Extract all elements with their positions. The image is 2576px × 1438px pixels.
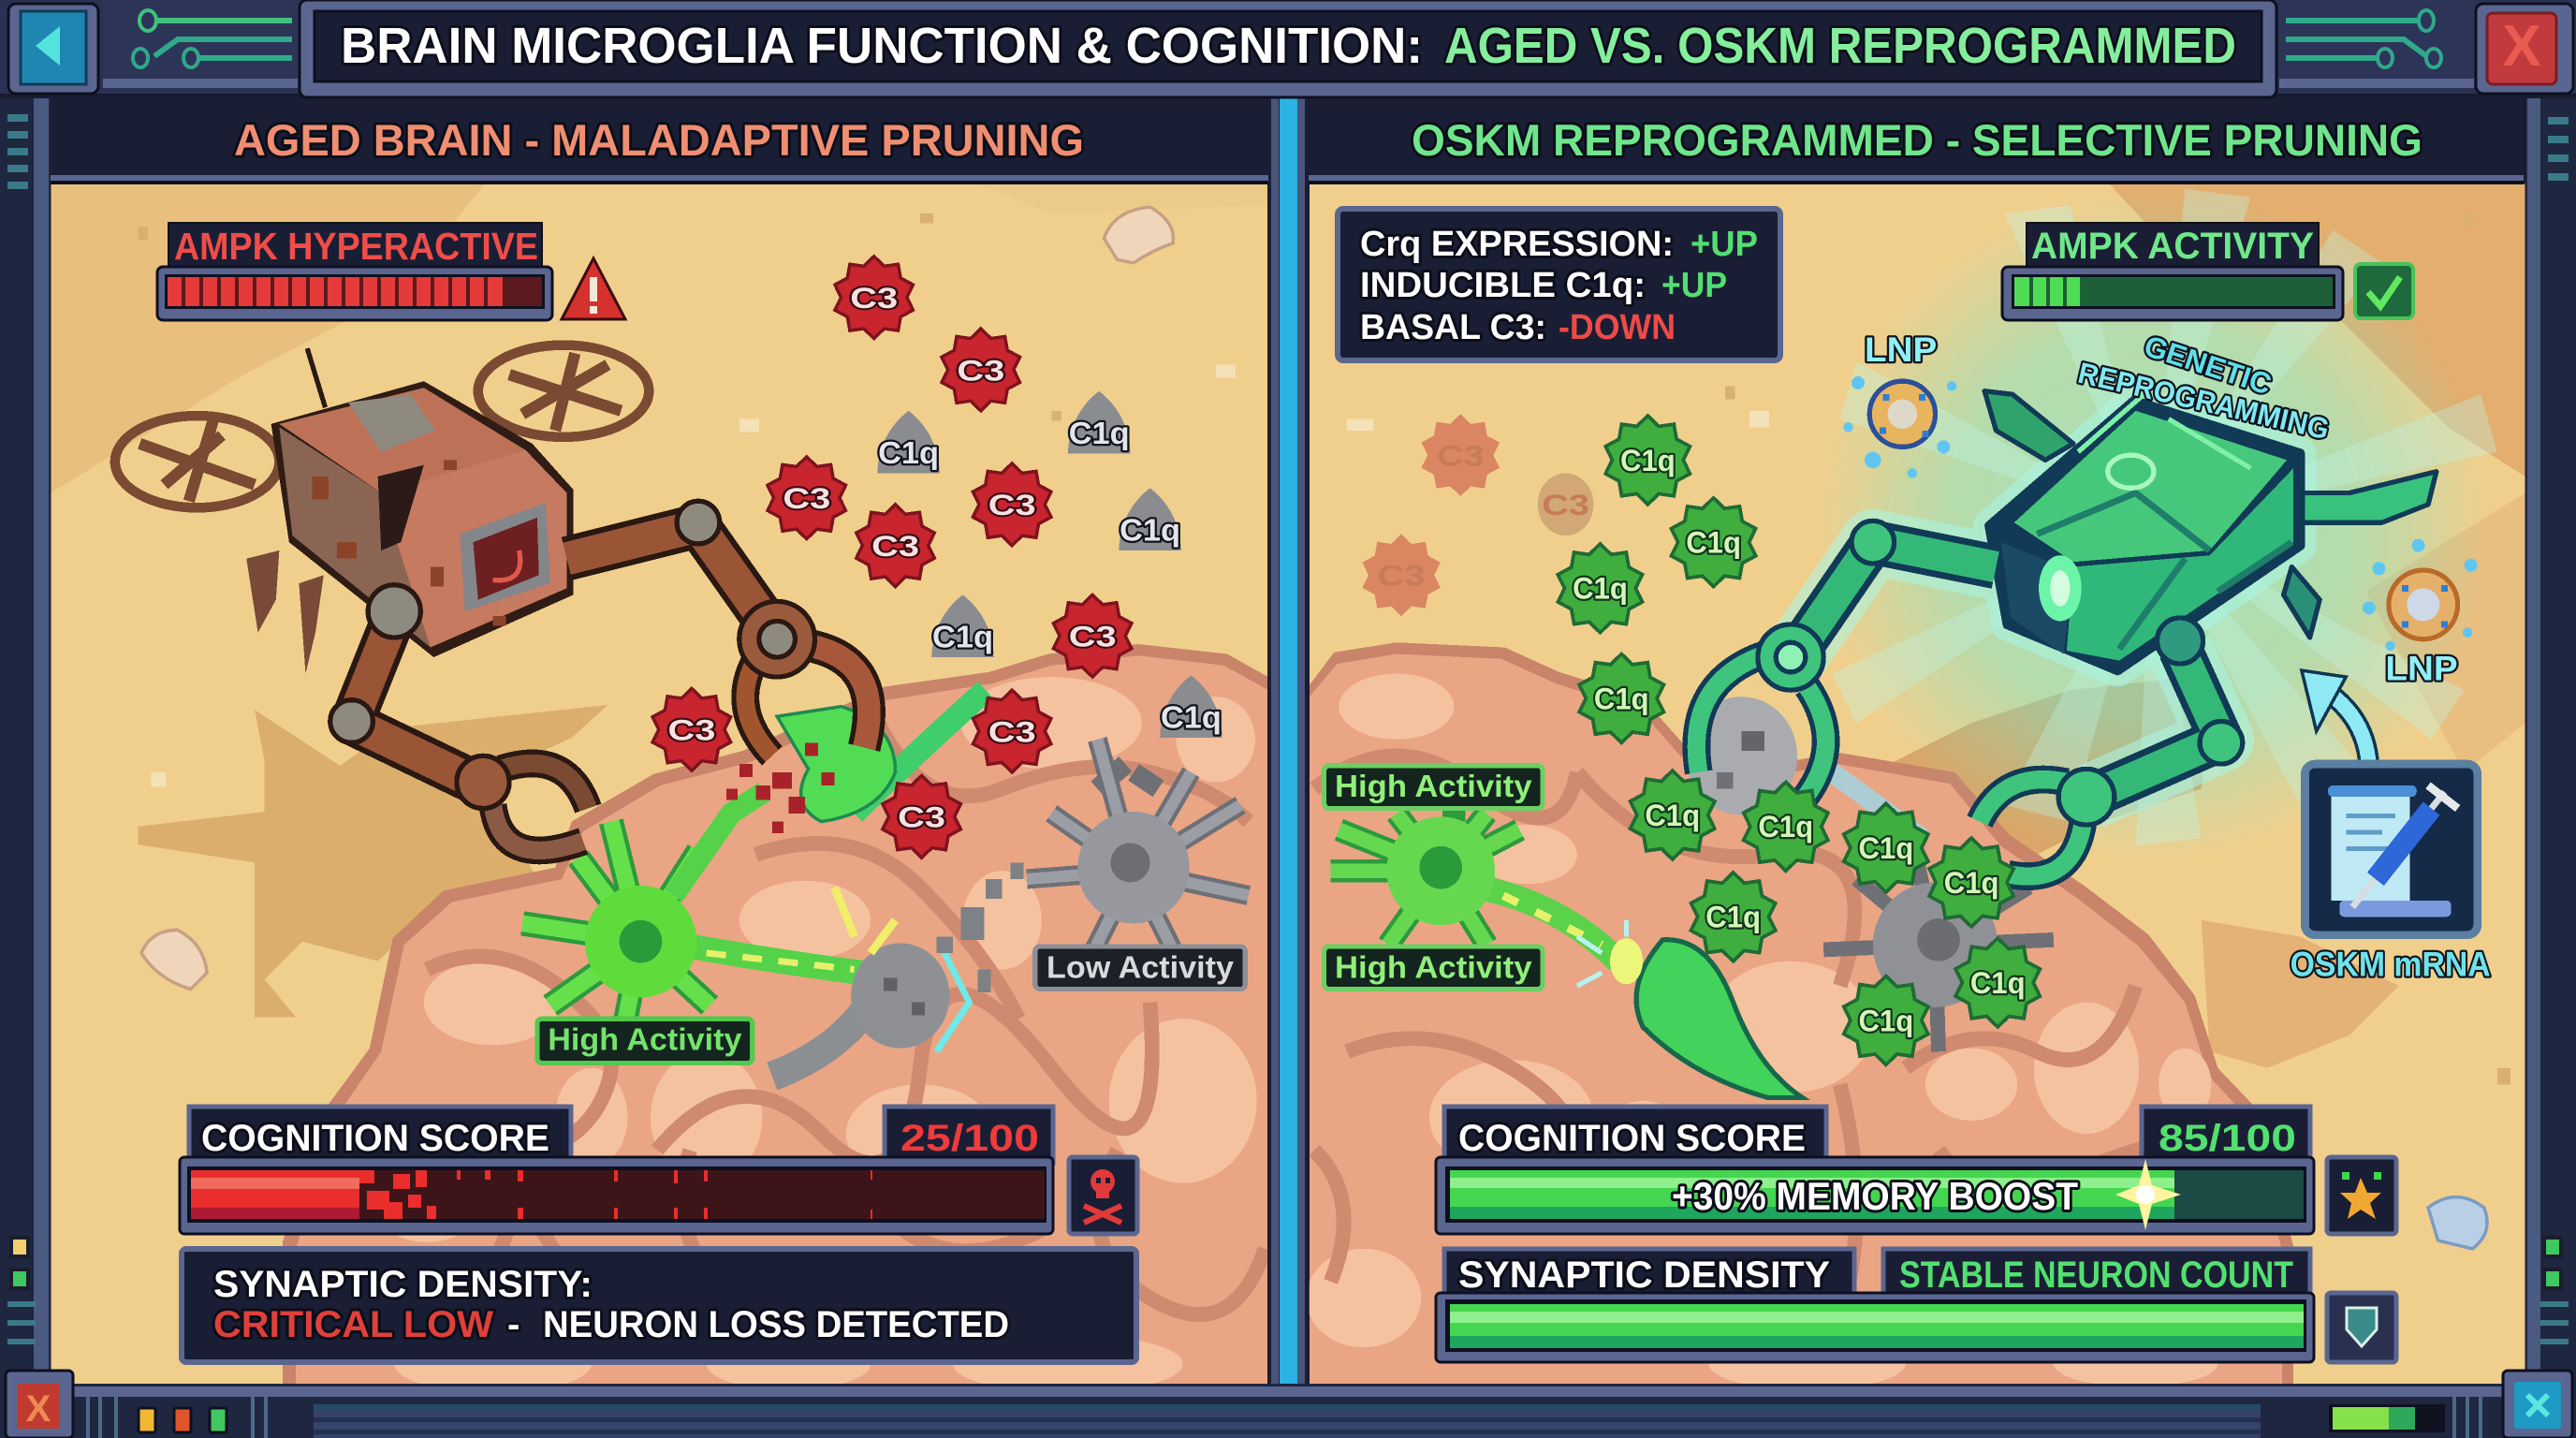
panel: aged brain scene xyxy=(51,184,1268,1393)
sand background xyxy=(1310,184,2525,1386)
label: high activity xyxy=(537,1019,753,1064)
gauge: cognition score reprogrammed: +30% MEMORY BOOST xyxy=(1672,1174,2078,1218)
gauge: cognition score aged: 25/100 xyxy=(900,1118,1039,1159)
status: AMPK hyperactive: AMPK HYPERACTIVE xyxy=(174,225,538,268)
button: back xyxy=(8,4,98,94)
gray synapse held in claw xyxy=(1686,697,1922,838)
gauge: cognition score reprogrammed xyxy=(1436,1107,2314,1234)
C3 token xyxy=(856,505,934,587)
C1q gray token xyxy=(1160,675,1222,738)
brain tissue xyxy=(283,644,1268,1393)
indicator lights xyxy=(139,1408,227,1432)
C3 token: C3 xyxy=(898,800,945,834)
C1q token: C1q xyxy=(1594,682,1649,715)
tokens: C3 complement xyxy=(652,257,1132,858)
stats box: expression: +UP xyxy=(1661,266,1727,305)
C3 token xyxy=(1053,594,1132,677)
C3 token: C3 xyxy=(988,488,1036,521)
faded C3: C3 xyxy=(1542,488,1589,521)
C1q token xyxy=(1691,873,1776,961)
panel header: OSKM reprogrammed: OSKM REPROGRAMMED - SELECTIVE PRUNING xyxy=(1412,115,2422,165)
icon: seashell and pebbles xyxy=(1347,213,2510,1249)
icon: star badge xyxy=(2327,1157,2396,1234)
tokens: gray C1q xyxy=(877,391,1222,738)
panel header: aged brain xyxy=(51,96,1268,184)
C1q token xyxy=(1558,544,1643,633)
label: LNP upper: LNP xyxy=(1865,330,1937,369)
title bar: BRAIN MICROGLIA FUNCTION & COGNITION: xyxy=(341,18,1423,74)
gauge: bottom-right energy xyxy=(2329,1404,2445,1432)
C1q token: C1q xyxy=(1758,810,1813,844)
arrow: mRNA to drone xyxy=(2302,670,2369,766)
gauge: synaptic density reprogrammed: STABLE NEURON COUNT xyxy=(1899,1255,2293,1296)
faded C3 xyxy=(1538,473,1593,536)
C1q token xyxy=(1631,770,1715,859)
arms and claws xyxy=(352,526,869,850)
arms and claws xyxy=(1696,542,2221,876)
C3 token: C3 xyxy=(667,713,715,747)
label: high activity upper: High Activity xyxy=(1335,770,1532,804)
C1q token xyxy=(1579,654,1663,742)
neuron: high activity xyxy=(522,792,862,1027)
C1q token xyxy=(1929,838,2013,927)
gauge: synaptic density reprogrammed: SYNAPTIC DENSITY xyxy=(1458,1255,1830,1296)
panel: synaptic density aged: SYNAPTIC DENSITY: xyxy=(213,1264,593,1305)
C3 token xyxy=(973,463,1051,546)
C1q token xyxy=(1744,782,1828,871)
gauge: cognition score aged xyxy=(180,1107,1053,1234)
C1q gray token: C1q xyxy=(878,436,939,471)
label: genetic reprogramming: REPROGRAMMING xyxy=(2075,356,2333,446)
top bar background xyxy=(0,0,2576,94)
panel header: aged brain: AGED BRAIN - MALADAPTIVE PRUNING xyxy=(234,115,1084,165)
stats box: expression xyxy=(1338,209,1780,360)
C1q gray token: C1q xyxy=(1120,513,1180,548)
icon: LNP upper xyxy=(1843,376,1956,478)
tokens: green C1q xyxy=(1558,416,2040,1064)
label: high activity lower: High Activity xyxy=(1335,950,1532,985)
tokens: faded C3 xyxy=(1362,414,1593,616)
C3 token: C3 xyxy=(871,529,919,563)
C1q token: C1q xyxy=(1858,831,1913,865)
panel: synaptic density aged: CRITICAL LOW xyxy=(213,1304,493,1345)
panel: synaptic density aged xyxy=(182,1249,1136,1362)
faded C3: C3 xyxy=(1437,439,1485,473)
faded C3 xyxy=(1422,414,1500,496)
C1q token xyxy=(1844,803,1928,892)
drone body xyxy=(271,381,574,657)
stats box: expression: +UP xyxy=(1690,225,1758,264)
C1q gray token: C1q xyxy=(932,621,993,655)
label: OSKM mRNA: OSKM mRNA xyxy=(2291,946,2491,984)
neuron: low activity gray xyxy=(1027,740,1249,970)
rear legs xyxy=(246,550,324,674)
panel: synaptic density aged: NEURON LOSS DETECTED xyxy=(543,1304,1009,1345)
icon: warning triangle xyxy=(562,258,625,319)
drone body xyxy=(1989,394,2300,670)
halo around drone xyxy=(1794,401,2300,797)
circuit decoration left xyxy=(103,0,298,88)
C3 token xyxy=(835,257,913,339)
title bar xyxy=(300,0,2276,97)
stats box: expression: INDUCIBLE C1q: xyxy=(1360,266,1646,305)
C1q gray token xyxy=(1119,488,1181,550)
synapse: damaged gray terminal xyxy=(772,862,1023,1077)
status: AMPK activity: AMPK ACTIVITY xyxy=(2031,226,2314,267)
button: bottom-right xyxy=(2503,1371,2572,1438)
C1q gray token xyxy=(931,594,994,657)
label: genetic reprogramming: GENETIC xyxy=(2140,329,2276,402)
C1q token xyxy=(1605,416,1690,505)
title bar: AGED VS. OSKM REPROGRAMMED xyxy=(1444,18,2236,74)
C3 token: C3 xyxy=(850,281,898,315)
C3 token: C3 xyxy=(988,714,1036,748)
rotors and antenna xyxy=(115,345,649,507)
panel header: OSKM reprogrammed xyxy=(1309,96,2524,184)
button: bottom-left close xyxy=(6,1371,73,1438)
C1q token xyxy=(1844,976,1928,1064)
synapse: healthy green terminal xyxy=(1577,920,1802,1097)
icon: seashells and pebbles xyxy=(138,207,1236,990)
C1q token: C1q xyxy=(1620,444,1676,477)
C3 token xyxy=(883,775,960,858)
divider between panels xyxy=(1267,98,1309,1390)
bottom bar xyxy=(0,1384,2576,1438)
panel: synaptic density aged: - xyxy=(507,1304,520,1345)
C1q gray token xyxy=(877,411,940,473)
label: LNP lower: LNP xyxy=(2385,650,2458,688)
faded C3: C3 xyxy=(1378,559,1426,593)
stats box: expression: -DOWN xyxy=(1559,308,1676,347)
C1q token: C1q xyxy=(1944,866,1999,900)
C1q token: C1q xyxy=(1686,526,1741,560)
button: bottom-left close: X xyxy=(26,1388,51,1430)
status: AMPK activity xyxy=(2002,223,2343,320)
C1q token: C1q xyxy=(1970,966,2026,1000)
C3 token xyxy=(768,457,846,539)
label: high activity: High Activity xyxy=(548,1023,742,1058)
C3 token: C3 xyxy=(783,481,830,515)
glow: genetic reprogramming aura xyxy=(1815,189,2497,862)
C3 token: C3 xyxy=(957,353,1004,387)
icon: shield badge xyxy=(2327,1293,2396,1362)
neuron: gray target xyxy=(1823,846,2054,1051)
stats box: expression: BASAL C3: xyxy=(1360,308,1546,347)
C1q token: C1q xyxy=(1573,572,1628,606)
icon: skull badge xyxy=(1069,1157,1137,1234)
panel: OSKM reprogrammed scene xyxy=(1306,184,2525,1390)
gauge: synaptic density reprogrammed xyxy=(1436,1249,2314,1362)
stats box: expression: Crq EXPRESSION: xyxy=(1360,225,1674,264)
C1q gray token: C1q xyxy=(1069,417,1130,451)
icon: OSKM mRNA scroll and syringe card xyxy=(2305,764,2478,935)
C3 token xyxy=(942,329,1020,411)
faded C3 xyxy=(1362,534,1441,616)
C3 token: C3 xyxy=(1069,620,1117,653)
fins xyxy=(1984,391,2437,638)
C1q gray token xyxy=(1068,391,1131,453)
rusty drone: maladaptive microglia xyxy=(115,345,869,850)
C1q token xyxy=(1955,938,2040,1027)
icon: check badge xyxy=(2355,264,2413,318)
icon: LNP lower xyxy=(2363,539,2478,651)
button: close: X xyxy=(2502,14,2541,79)
C3 token xyxy=(652,688,731,770)
C1q gray token: C1q xyxy=(1161,701,1222,736)
green drone: selective microglia xyxy=(1696,391,2437,876)
C1q token: C1q xyxy=(1858,1004,1913,1037)
button: close xyxy=(2476,4,2573,94)
circuit decoration right xyxy=(2279,0,2474,88)
status: AMPK hyperactive xyxy=(157,223,552,320)
C3 token xyxy=(973,690,1051,772)
brain tissue xyxy=(1306,642,2293,1390)
synapse being pruned: green bulb with debris xyxy=(726,690,986,833)
gauge: cognition score reprogrammed: COGNITION SCORE xyxy=(1458,1118,1806,1159)
sand background xyxy=(51,184,1268,1386)
gauge: cognition score aged: COGNITION SCORE xyxy=(201,1118,549,1159)
gauge: cognition score reprogrammed: 85/100 xyxy=(2159,1118,2296,1159)
C1q token xyxy=(1671,498,1756,587)
C1q token: C1q xyxy=(1705,901,1761,934)
label: low activity: Low Activity xyxy=(1046,950,1235,985)
C1q token: C1q xyxy=(1645,799,1700,832)
neuron: high activity xyxy=(1331,764,1618,961)
